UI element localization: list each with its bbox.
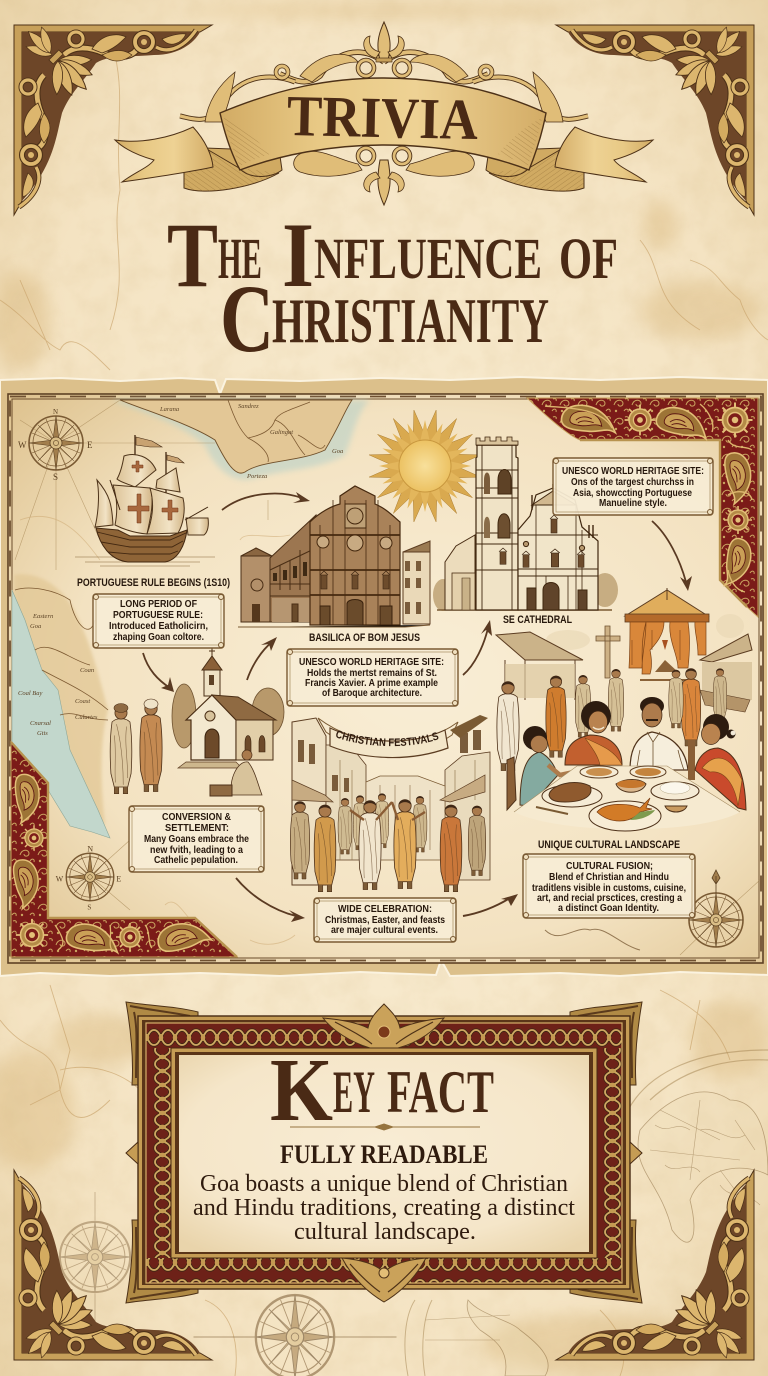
map: left coast and sea: Coal Bay xyxy=(18,690,42,697)
key fact heading: FACT xyxy=(387,1059,494,1125)
background cross xyxy=(596,626,620,678)
ornate frame xyxy=(126,1002,642,1303)
se cathedral xyxy=(433,437,618,611)
market stalls xyxy=(496,614,752,712)
crowd behind the table xyxy=(497,668,727,771)
title line one: I xyxy=(282,204,314,306)
corner ornament: bottom left xyxy=(14,1170,212,1360)
callout: cultural fusion: art, and recial prsctices, cresting a xyxy=(537,893,682,904)
divider xyxy=(290,1124,480,1130)
compass rose: lower left: E xyxy=(116,874,121,883)
map: top coast xyxy=(112,400,370,480)
callout: cathedral unesco site xyxy=(553,458,713,515)
callout: cathedral unesco site: UNESCO WORLD HERITAGE SITE: xyxy=(562,466,704,477)
festival crowd xyxy=(290,794,486,892)
red paisley border: bottom left xyxy=(11,742,237,957)
ship xyxy=(75,435,215,566)
corner ornament: top right xyxy=(556,25,754,215)
callout: wide celebration xyxy=(314,898,456,942)
compass rose: top left: E xyxy=(87,440,93,450)
chapel xyxy=(172,648,284,768)
key fact heading: K xyxy=(270,1041,333,1140)
arrow: conversion to celebration xyxy=(236,878,305,922)
arrow: rule to chapel xyxy=(143,653,174,692)
label: basilica of bom jesus: BASILICA OF BOM JESUS xyxy=(309,632,420,644)
compass rose: lower left: N xyxy=(87,844,93,853)
table with dishes xyxy=(514,766,740,831)
label: se cathedral: SE CATHEDRAL xyxy=(503,614,572,626)
title line two: C xyxy=(220,265,274,372)
label: portuguese rule begins: PORTUGUESE RULE BEGINS (1S10) xyxy=(77,577,230,589)
callout: wide celebration: are majer cultural events. xyxy=(331,925,438,936)
woman in red sari xyxy=(695,714,746,810)
callout: cathedral unesco site: Asia, showccting Portuguese xyxy=(573,488,692,499)
key fact heading: EY xyxy=(333,1059,375,1125)
mother in orange sari xyxy=(565,701,622,765)
boy in teal shirt xyxy=(507,726,574,810)
map: left coast and sea: Coan xyxy=(80,667,94,674)
compass rose: lower left: S xyxy=(87,904,91,912)
title line one: OF xyxy=(559,226,618,291)
callout: conversion and settlement: Many Goans embrace the xyxy=(144,834,249,845)
callout: basilica unesco site xyxy=(287,649,458,706)
flow arrows xyxy=(143,492,692,922)
callout: basilica unesco site: UNESCO WORLD HERITAGE SITE: xyxy=(299,657,444,668)
title line one: NFLUENCE xyxy=(314,226,542,291)
water under ship xyxy=(75,557,215,566)
map: top coast: Galingut xyxy=(270,429,293,436)
figures beside chapel xyxy=(110,699,262,796)
callout: conversion and settlement xyxy=(129,806,264,872)
red paisley border: top right xyxy=(527,398,758,617)
map: faint grid lines xyxy=(15,400,760,955)
callout: long period of portuguese rule: PORTUGUESE RULE: xyxy=(113,610,203,621)
map: top coast: Goa xyxy=(332,448,343,455)
compass rose: top left: W xyxy=(18,440,27,450)
callout: wide celebration: Christmas, Easter, and feasts xyxy=(325,915,445,926)
key fact heading xyxy=(270,1041,494,1140)
map: left coast and sea: Cnarsal xyxy=(30,720,51,727)
right ribbon tail xyxy=(486,127,653,191)
orange pavilion xyxy=(625,588,709,680)
map: top coast: Porteza xyxy=(246,473,267,480)
map: left coast and sea: Gtis xyxy=(37,730,48,737)
title line one xyxy=(167,204,618,306)
christian festivals street scene xyxy=(290,715,490,892)
title line two: HRISTIANITY xyxy=(272,286,549,356)
title line two xyxy=(220,265,549,372)
market and pavilion xyxy=(496,588,752,771)
arrow: celebration to cultural fusion xyxy=(463,894,518,916)
filigree below ribbon xyxy=(294,148,474,205)
callout: conversion and settlement: SETTLEMENT: xyxy=(165,823,229,834)
filigree above ribbon xyxy=(180,22,588,122)
callout: cultural fusion: traditlens visible in customs, cuisine, xyxy=(532,883,686,894)
map: top coast: Sandrez xyxy=(238,403,259,410)
street buildings xyxy=(292,715,490,885)
faint world map: right side xyxy=(628,1050,768,1242)
corner ornament: top left xyxy=(14,25,212,215)
compass rose: lower right xyxy=(689,870,743,947)
red crosses on sails xyxy=(128,461,178,523)
readable text panel xyxy=(179,1041,589,1252)
compass rose: lower left: W xyxy=(56,874,64,883)
trivia banner xyxy=(115,22,653,205)
faint compass: lower left xyxy=(37,1192,154,1322)
title line one: HE xyxy=(218,226,262,291)
callout: cultural fusion: CULTURAL FUSION; xyxy=(566,861,653,872)
callout: cultural fusion: a distinct Goan Identity. xyxy=(558,903,659,914)
key fact body text: and Hindu traditions, creating a distinct xyxy=(193,1194,575,1221)
callout: basilica unesco site: Francis Xavier. A prime example xyxy=(305,678,438,689)
map: left coast and sea: Coast xyxy=(75,698,90,705)
compass rose: top left xyxy=(18,408,93,482)
trivia heading: TRIVIA xyxy=(286,83,479,152)
callout: long period of portuguese rule xyxy=(93,594,224,648)
callout: basilica unesco site: Holds the mertst remains of St. xyxy=(307,668,437,679)
title line one: T xyxy=(167,204,218,306)
map: left coast and sea: Culartes xyxy=(75,714,98,721)
callout: conversion and settlement: CONVERSION & xyxy=(162,812,232,823)
callout: basilica unesco site: of Baroque architecture. xyxy=(322,688,422,699)
callout: cultural fusion: Blend ef Christian and Hindu xyxy=(549,872,669,883)
callout: conversion and settlement: new fvith, leading to a xyxy=(150,845,243,856)
compass rose: top left: S xyxy=(53,472,58,482)
key fact body text: Goa boasts a unique blend of Christian xyxy=(200,1170,568,1197)
compass rose: lower left xyxy=(56,844,121,912)
callout: long period of portuguese rule: LONG PERIOD OF xyxy=(120,599,197,610)
callout: long period of portuguese rule: zhaping Goan coltore. xyxy=(113,632,204,643)
key fact body text: cultural landscape. xyxy=(294,1218,476,1245)
map: top coast: Larana xyxy=(159,406,179,413)
faint world map: lower centre xyxy=(405,1300,548,1376)
festival banner title: CHRISTIAN FESTIVALS xyxy=(336,730,438,746)
sub heading: FULLY READABLE xyxy=(280,1140,488,1169)
arrow: chapel to basilica xyxy=(247,637,277,680)
callout labels and boxes xyxy=(77,458,713,942)
faint compass: lower centre xyxy=(194,1295,396,1376)
family at dinner table xyxy=(507,697,746,831)
arrow: basilica to cathedral xyxy=(463,620,492,675)
callout: cathedral unesco site: Ons of the targest churchss in xyxy=(571,477,694,488)
main title xyxy=(167,204,618,372)
key fact panel xyxy=(126,1002,642,1303)
arrow: unesco callout to pavilion xyxy=(652,521,692,591)
callout: cultural fusion xyxy=(523,854,695,918)
ribbon body xyxy=(220,78,546,170)
crest bottom xyxy=(342,1258,426,1302)
callout: long period of portuguese rule: Introduced Eatholicirn, xyxy=(109,621,208,632)
callout: wide celebration: WIDE CELEBRATION: xyxy=(338,904,432,915)
compass rose: top left: N xyxy=(53,408,58,416)
corner ornament: bottom right xyxy=(556,1170,754,1360)
map: left coast and sea: Goa xyxy=(30,623,41,630)
map: left coast and sea: Eastern xyxy=(32,613,53,620)
callout: conversion and settlement: Cathelic pepulation. xyxy=(154,855,238,866)
crest top xyxy=(323,1004,444,1048)
festival banner xyxy=(318,718,458,758)
sun xyxy=(358,399,492,533)
label: unique cultural landscape: UNIQUE CULTURAL LANDSCAPE xyxy=(538,839,680,851)
key fact body text xyxy=(193,1170,575,1245)
map: left coast and sea xyxy=(12,574,110,838)
arrow: ship to basilica xyxy=(222,492,310,510)
father in white shirt xyxy=(630,697,695,780)
callout: cathedral unesco site: Manueline style. xyxy=(599,498,667,509)
basilica of bom jesus xyxy=(238,486,430,627)
left ribbon tail xyxy=(115,127,282,191)
torn map panel xyxy=(0,376,768,977)
